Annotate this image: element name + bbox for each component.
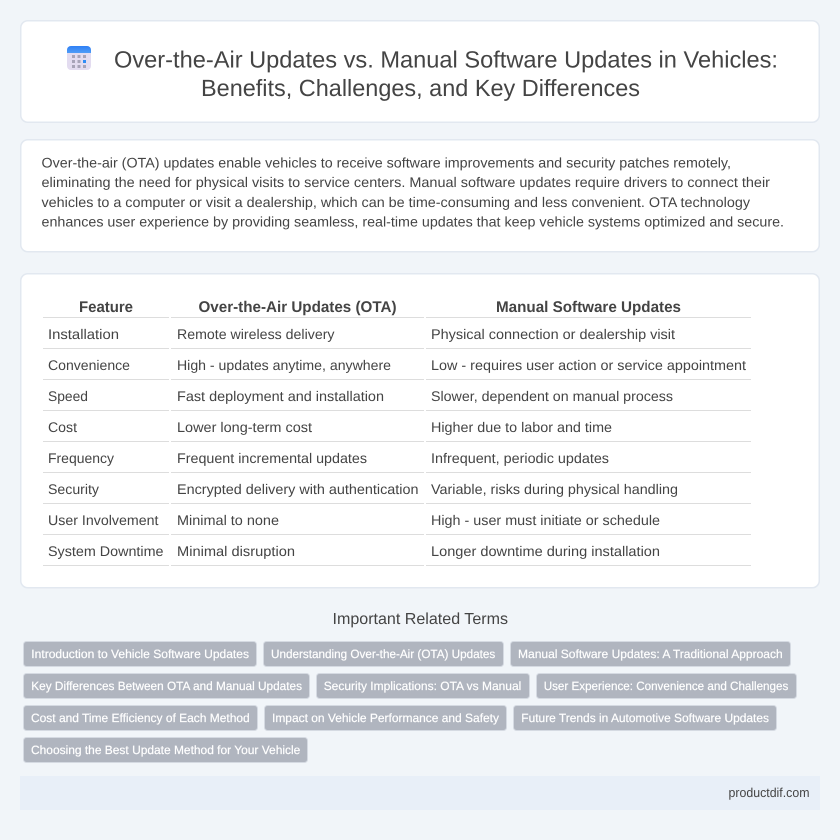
- table row: frequency: Frequency: [48, 450, 114, 466]
- panel: comparison table: [21, 274, 819, 588]
- table row: convenience: Low - requires user action or service appointment: [431, 357, 746, 373]
- table row: security: Security: [48, 481, 99, 497]
- table row: security: Encrypted delivery with authentication: [177, 481, 418, 497]
- table header row: [79, 299, 681, 316]
- tag: manual updates: Manual Software Updates: A Traditional Approach: [518, 647, 783, 661]
- tag: manual updates: [510, 642, 790, 666]
- tag: introduction: [24, 642, 256, 666]
- tag: key differences: [24, 674, 310, 698]
- table row: system downtime: [48, 543, 660, 559]
- table row: convenience: Convenience: [48, 357, 130, 373]
- tag: understanding OTA: Understanding Over-the-Air (OTA) Updates: [271, 647, 495, 661]
- text block: introduction paragraph: enhances user experience by providing seamless, real-time updates that keep vehicle systems optimized and secure.: [42, 214, 784, 230]
- table row: cost: Higher due to labor and time: [431, 419, 612, 435]
- table row: frequency: Frequent incremental updates: [177, 450, 367, 466]
- table row: cost: Cost: [48, 419, 77, 435]
- text block: introduction paragraph: Over-the-air (OTA) updates enable vehicles to receive software improvements and security patches remotely,: [42, 154, 731, 170]
- table row: speed: Slower, dependent on manual process: [431, 388, 673, 404]
- tag: choosing best method: Choosing the Best Update Method for Your Vehicle: [31, 743, 301, 757]
- table row: user involvement: High - user must initiate or schedule: [431, 512, 660, 528]
- title: Benefits, Challenges, and Key Differences: [201, 75, 640, 101]
- tag: performance and safety: Impact on Vehicle Performance and Safety: [272, 711, 499, 725]
- tag: user experience: [536, 674, 796, 698]
- table row: frequency: Infrequent, periodic updates: [431, 450, 609, 466]
- tag: cost and time: Cost and Time Efficiency of Each Method: [31, 711, 250, 725]
- icon: calendar: [67, 46, 91, 70]
- tag: user experience: User Experience: Convenience and Challenges: [544, 679, 788, 693]
- tag: understanding OTA: [264, 642, 504, 666]
- table row: security: Variable, risks during physical handling: [431, 481, 678, 497]
- table row: user involvement: [48, 512, 660, 528]
- table row: speed: Fast deployment and installation: [177, 388, 384, 404]
- related term tags: [24, 642, 796, 762]
- table row: frequency: [48, 450, 609, 466]
- tag: future trends: [514, 706, 776, 730]
- footer source text: productdif.com: [728, 785, 810, 800]
- table row: installation: Installation: [48, 326, 119, 342]
- table row: user involvement: User Involvement: [48, 512, 159, 528]
- text block: introduction paragraph: eliminating the need for physical visits to service centers. Manual software updates require drivers to connect their: [42, 174, 770, 190]
- tag: performance and safety: [264, 706, 506, 730]
- tag: key differences: Key Differences Between OTA and Manual Updates: [31, 679, 302, 693]
- tag: security implications: Security Implications: OTA vs Manual: [324, 679, 521, 693]
- text block: introduction paragraph: [42, 154, 784, 230]
- tag: cost and time: [24, 706, 258, 730]
- panel: header: [21, 21, 819, 122]
- title: [114, 46, 778, 101]
- table row: security: [48, 481, 678, 497]
- table row: system downtime: System Downtime: [48, 543, 164, 559]
- footer band: [20, 776, 820, 810]
- table row: system downtime: Longer downtime during installation: [431, 543, 660, 559]
- table row: speed: [48, 388, 673, 404]
- tag: future trends: Future Trends in Automotive Software Updates: [521, 711, 769, 725]
- panel: introduction: [21, 140, 819, 252]
- tag: choosing best method: [24, 738, 308, 762]
- table row: convenience: High - updates anytime, anywhere: [177, 357, 391, 373]
- table row: installation: Remote wireless delivery: [177, 326, 334, 342]
- table row: cost: Lower long-term cost: [177, 419, 312, 435]
- table row: convenience: [48, 357, 746, 373]
- heading: important related terms: Important Related Terms: [332, 611, 508, 628]
- title: Over-the-Air Updates vs. Manual Software Updates in Vehicles:: [114, 46, 778, 72]
- table row: installation: Physical connection or dealership visit: [431, 326, 675, 342]
- tag: security implications: [316, 674, 530, 698]
- tag: introduction: Introduction to Vehicle Software Updates: [31, 647, 249, 661]
- table row: system downtime: Minimal disruption: [177, 543, 295, 559]
- table header row: Manual Software Updates: [496, 299, 681, 316]
- table row: installation: [48, 326, 675, 342]
- text block: introduction paragraph: vehicles to a computer or visit a dealership, which can be time-consuming and less convenient. OTA technology: [42, 194, 750, 210]
- table header row: Over-the-Air Updates (OTA): [198, 299, 396, 316]
- table header row: Feature: [79, 299, 133, 316]
- table row: user involvement: Minimal to none: [177, 512, 279, 528]
- table row: cost: [48, 419, 612, 435]
- table row: speed: Speed: [48, 388, 88, 404]
